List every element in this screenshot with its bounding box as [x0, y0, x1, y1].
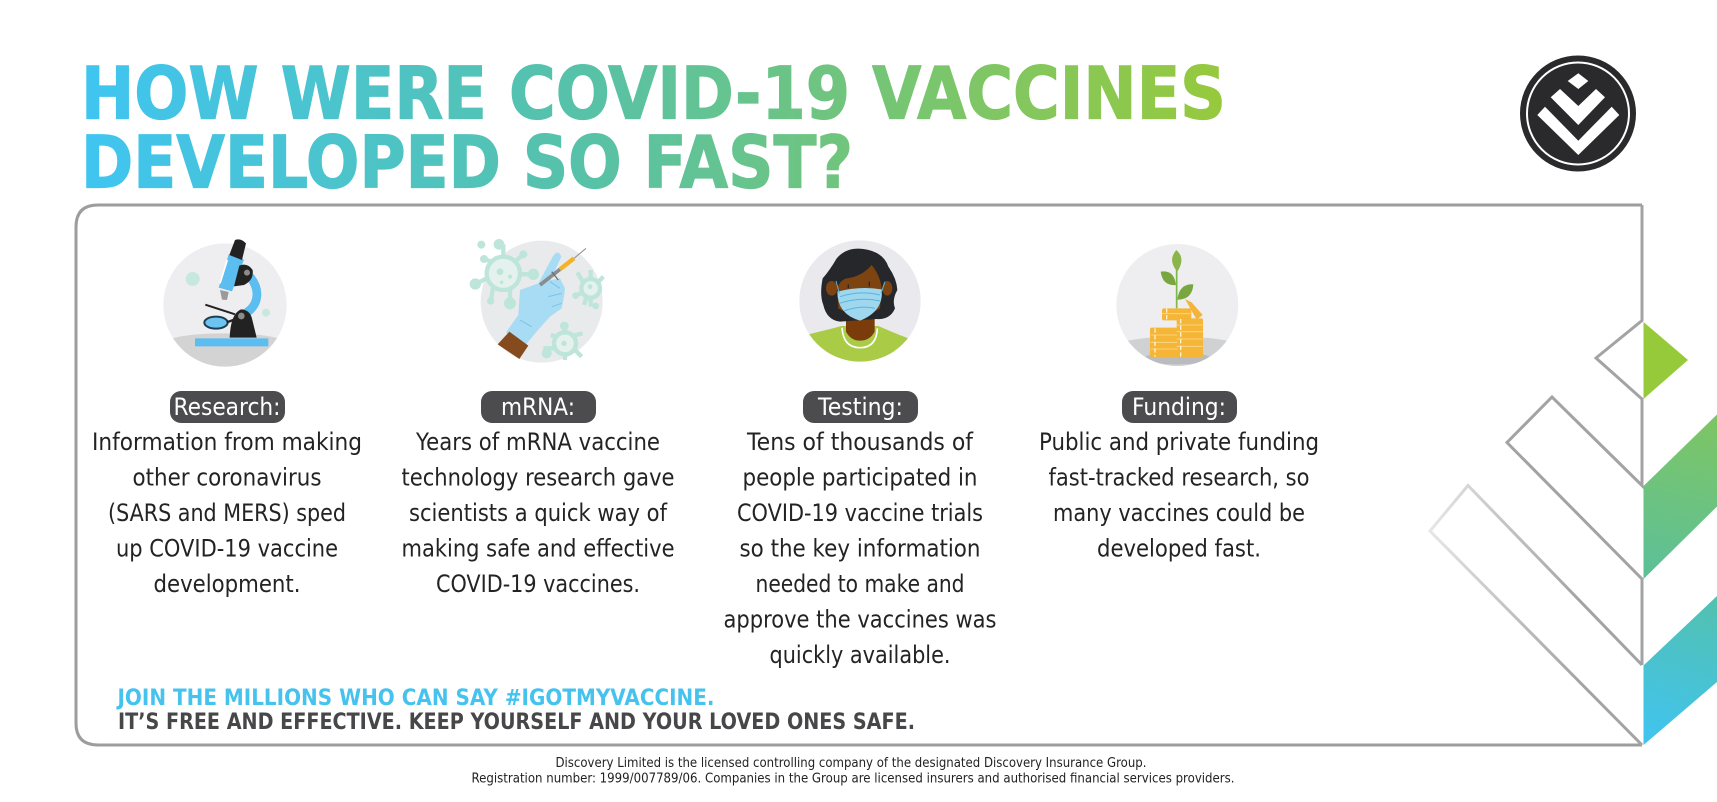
- icon: gloved hand with syringe: [470, 239, 603, 363]
- label: mrna: mRNA:: [501, 393, 575, 421]
- column: mrna: [402, 239, 674, 598]
- call to action: [116, 686, 915, 735]
- text: funding description: [1039, 428, 1319, 562]
- text: mrna description: technology research gave: [402, 464, 674, 492]
- text: testing description: [724, 428, 996, 669]
- title: [81, 52, 1226, 204]
- footer disclaimer: [472, 756, 1234, 786]
- icon: plant growing from coins: [1116, 244, 1238, 368]
- text: mrna description: making safe and effective: [402, 534, 674, 562]
- text: mrna description: scientists a quick way of: [409, 499, 668, 527]
- text: research description: other coronavirus: [132, 464, 322, 492]
- footer disclaimer: Discovery Limited is the licensed controlling company of the designated Discovery Insurance Group.: [556, 756, 1146, 771]
- text: mrna description: Years of mRNA vaccine: [415, 428, 660, 456]
- text: research description: up COVID-19 vaccine: [116, 534, 338, 562]
- column: testing: [724, 240, 996, 669]
- text: research description: Information from making: [92, 428, 362, 456]
- text: funding description: many vaccines could be: [1053, 499, 1305, 527]
- call to action: IT’S FREE AND EFFECTIVE. KEEP YOURSELF AND YOUR LOVED ONES SAFE.: [118, 710, 915, 735]
- title: DEVELOPED SO FAST?: [81, 120, 853, 204]
- column: funding: [1039, 244, 1319, 562]
- chevron: green triangle: [1644, 322, 1688, 399]
- text: testing description: people participated in: [742, 464, 978, 492]
- chevron: green band: [1644, 414, 1717, 579]
- text: funding description: fast-tracked research, so: [1048, 464, 1310, 492]
- label: testing: Testing:: [817, 393, 903, 421]
- text: funding description: developed fast.: [1097, 534, 1261, 562]
- column: research: [92, 239, 362, 598]
- icon: microscope: [163, 239, 287, 368]
- call to action: JOIN THE MILLIONS WHO CAN SAY #IGOTMYVACCINE.: [116, 686, 715, 711]
- panel: content frame: [76, 205, 1642, 745]
- decorative chevron outlines: [1430, 205, 1642, 745]
- footer disclaimer: Registration number: 1999/007789/06. Companies in the Group are licensed insurers and authorised financial services providers.: [472, 772, 1234, 786]
- text: testing description: quickly available.: [770, 641, 950, 669]
- text: research description: development.: [154, 570, 300, 598]
- text: research description: (SARS and MERS) sped: [108, 499, 346, 527]
- label: research: Research:: [174, 393, 280, 421]
- icon: discovery logo: [1520, 56, 1636, 172]
- text: testing description: needed to make and: [756, 570, 964, 598]
- text: testing description: approve the vaccines was: [724, 606, 996, 634]
- icon: person wearing mask: [799, 240, 921, 365]
- label: funding: Funding:: [1132, 393, 1226, 421]
- text: mrna description: COVID-19 vaccines.: [436, 570, 640, 598]
- text: research description: [92, 428, 362, 598]
- text: testing description: COVID-19 vaccine trials: [737, 499, 983, 527]
- text: funding description: Public and private funding: [1039, 428, 1319, 456]
- label: mrna: [481, 391, 596, 423]
- title: HOW WERE COVID-19 VACCINES: [81, 52, 1226, 136]
- text: testing description: Tens of thousands of: [746, 428, 974, 456]
- chevron: blue band: [1644, 596, 1717, 745]
- text: mrna description: [402, 428, 674, 598]
- text: testing description: so the key information: [740, 534, 980, 562]
